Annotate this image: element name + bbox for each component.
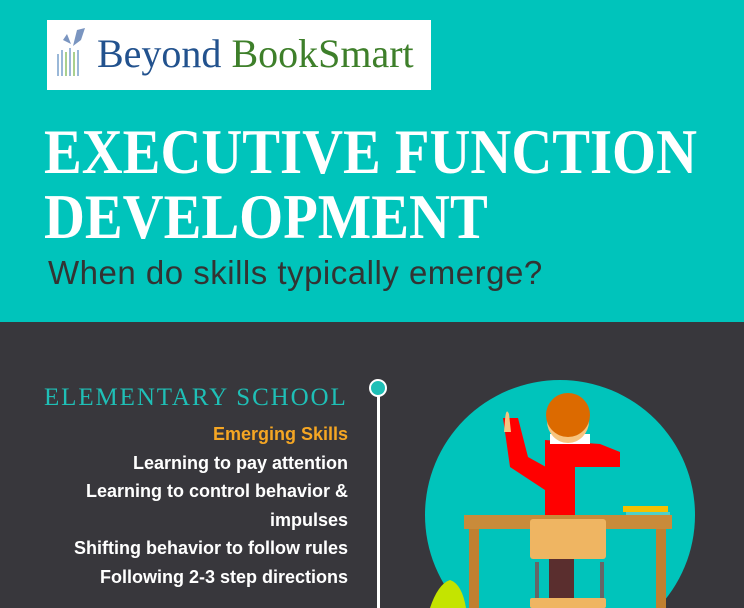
icon: logo bars and butterfly [57,28,85,76]
logo box [47,20,431,90]
panel: header [0,0,744,322]
panel: elementary school: Learning to control behavior & [86,481,348,501]
panel: elementary school: Learning to pay attention [133,453,348,473]
timeline [377,388,380,608]
panel: elementary school [0,322,744,608]
panel: elementary school: Following 2-3 step directions [100,567,348,587]
heading: ELEMENTARY SCHOOL [44,384,348,411]
logo text: Beyond BookSmart [97,31,414,76]
subtitle: When do skills typically emerge? [48,254,543,291]
title: EXECUTIVE FUNCTION [44,116,697,187]
skills list: Emerging Skills [213,424,348,444]
panel: elementary school: Shifting behavior to follow rules [74,538,348,558]
panel: header: DEVELOPMENT [44,181,488,252]
illustration: student at desk [425,380,695,608]
panel: elementary school: impulses [270,510,348,530]
